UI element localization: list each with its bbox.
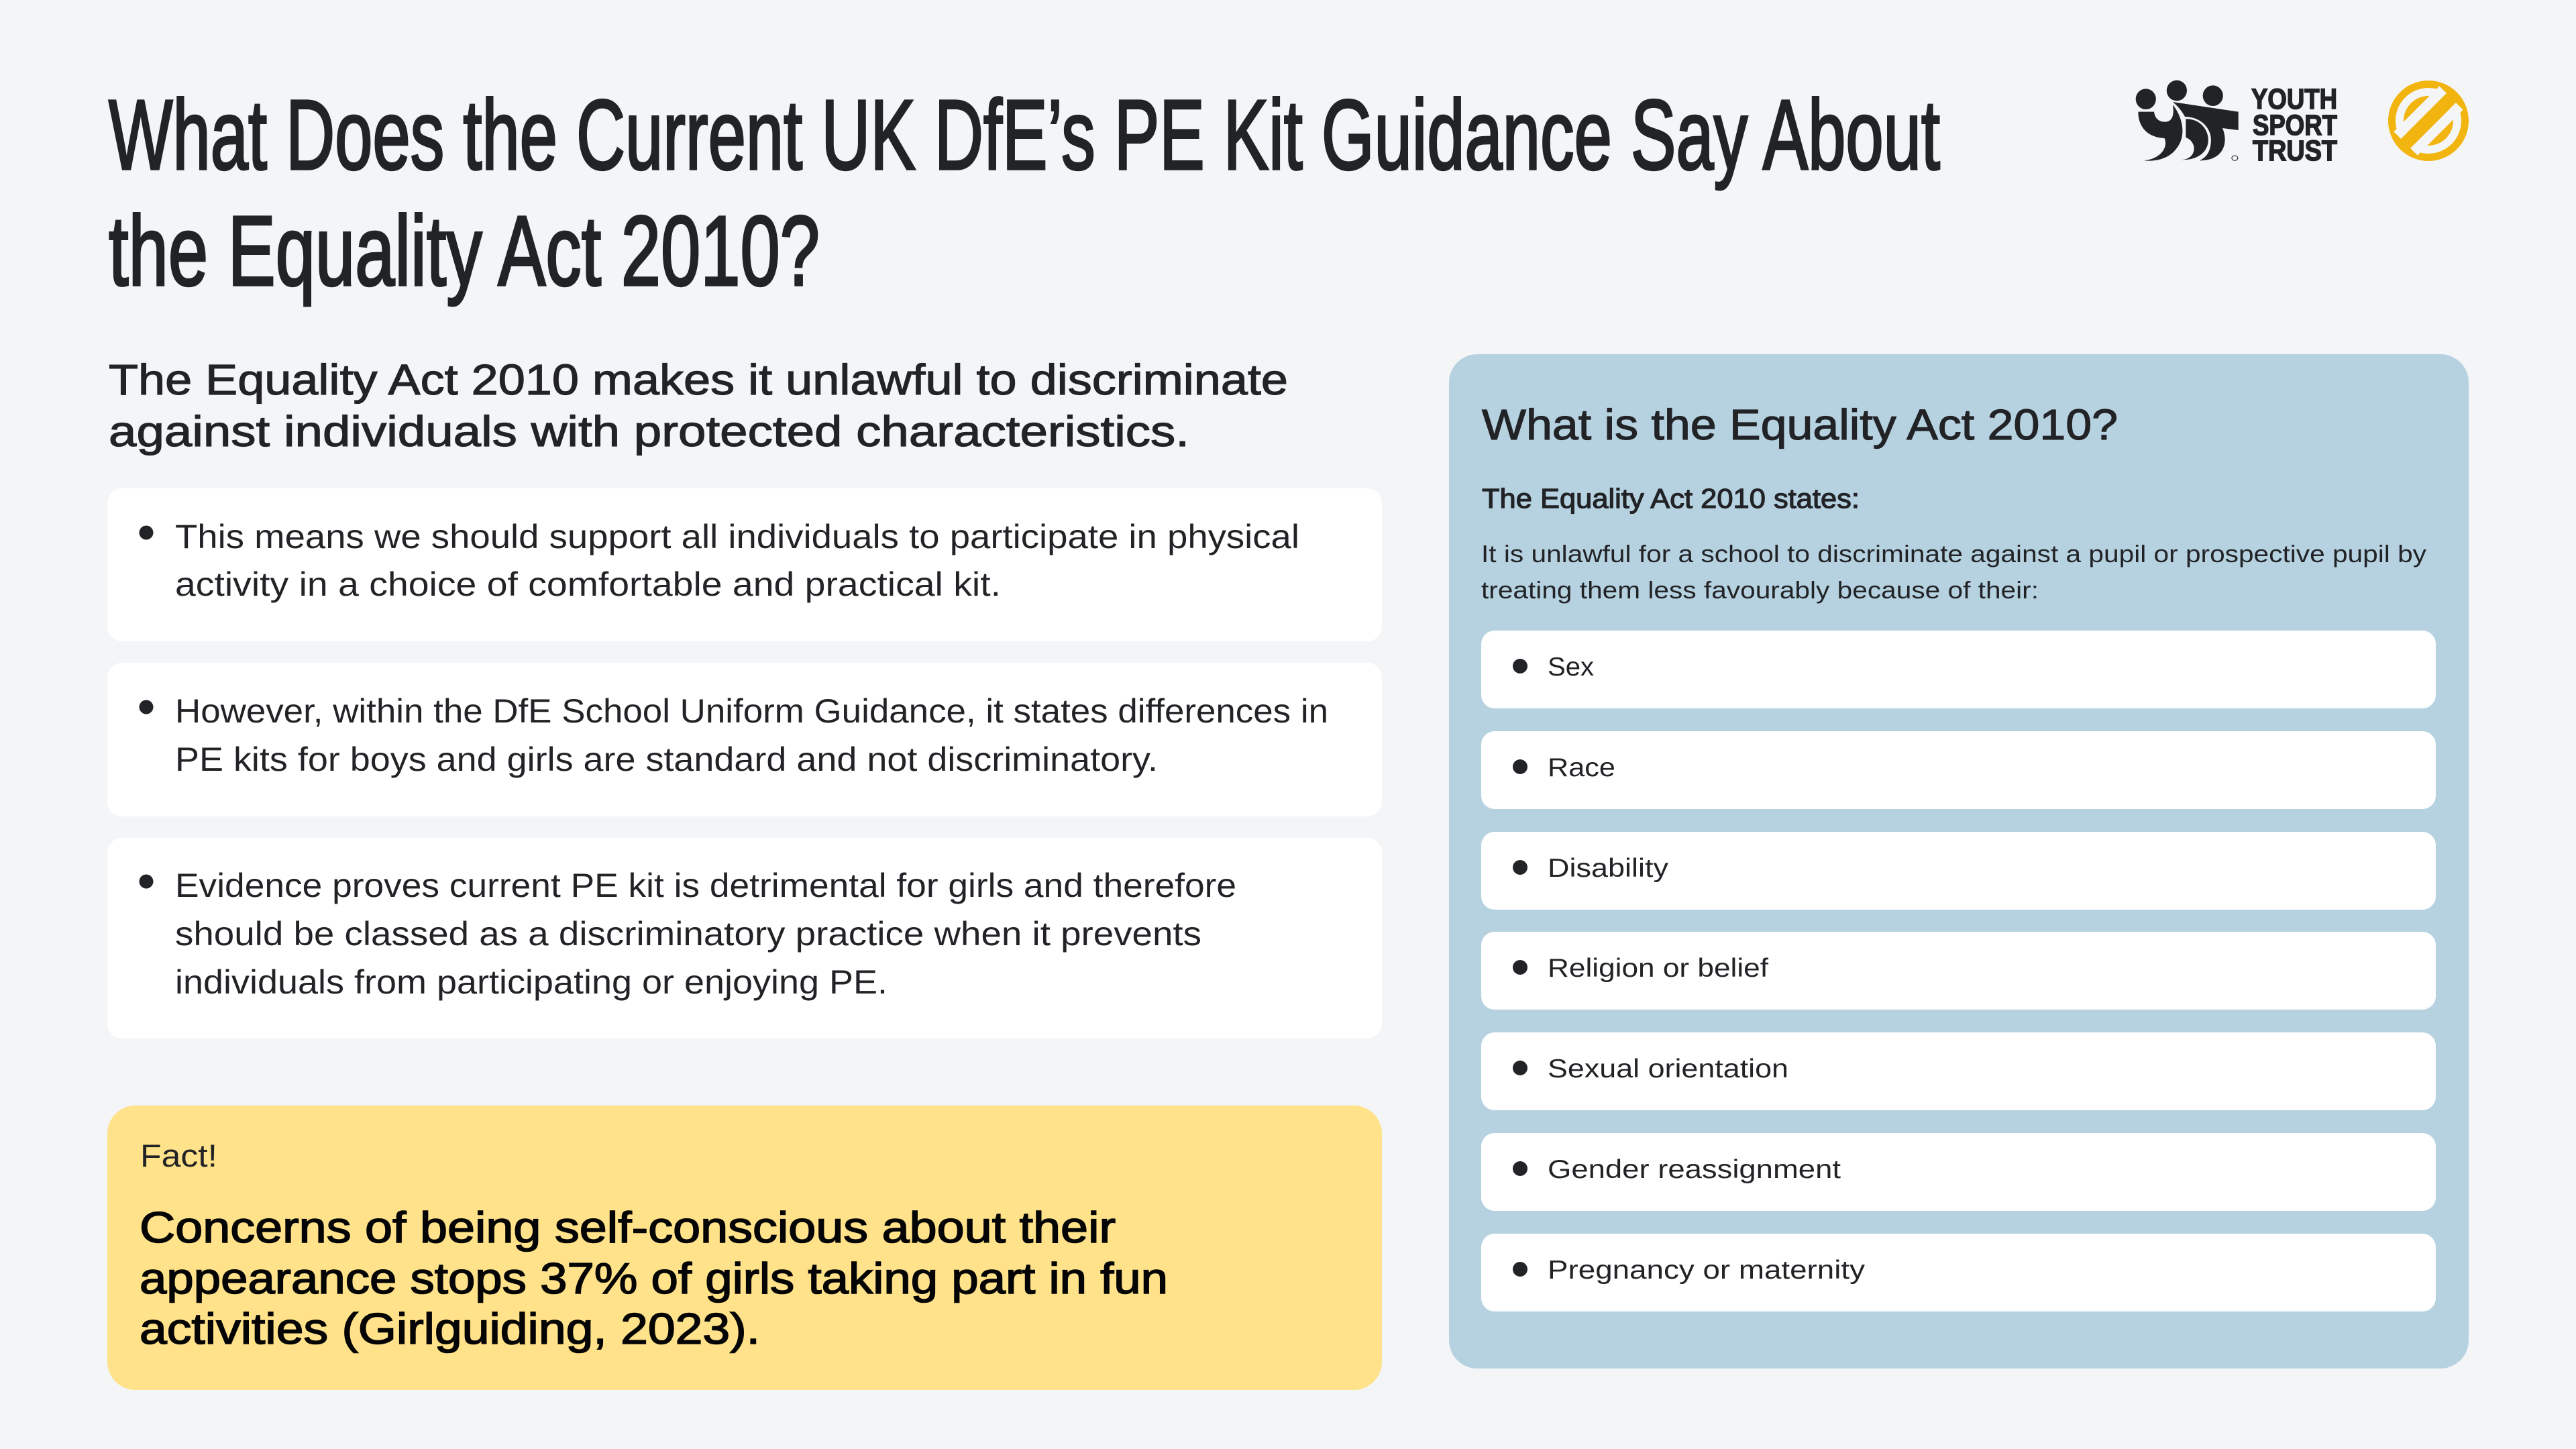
list item: disability bbox=[1481, 832, 2436, 910]
panel: fact callout: Concerns of being self-conscious about their bbox=[140, 1203, 1116, 1252]
panel: what is the Equality Act 2010 bbox=[1449, 354, 2469, 1368]
panel: bullet card 3: should be classed as a discriminatory practice when it prevents bbox=[175, 915, 1201, 953]
panel: fact callout: activities (Girlguiding, 2023). bbox=[140, 1304, 760, 1353]
panel: bullet card 1 bbox=[107, 488, 1382, 641]
panel heading: What is the Equality Act 2010? bbox=[1482, 400, 2118, 449]
list item: pregnancy or maternity: Pregnancy or maternity bbox=[1548, 1256, 1866, 1285]
title: the Equality Act 2010? bbox=[109, 196, 820, 307]
list item: sex: Sex bbox=[1548, 653, 1595, 682]
title bbox=[109, 80, 1940, 307]
panel: bullet card 3 bbox=[107, 838, 1382, 1038]
panel: bullet card 3: individuals from participating or enjoying PE. bbox=[175, 963, 888, 1001]
subheading: The Equality Act 2010 makes it unlawful to discriminate bbox=[109, 356, 1288, 404]
list item: gender reassignment bbox=[1481, 1133, 2436, 1211]
panel subheading: The Equality Act 2010 states: bbox=[1482, 483, 1860, 514]
panel: fact callout: Fact! bbox=[140, 1138, 217, 1173]
logo: Youth Sport Trust bbox=[2136, 80, 2337, 167]
subheading bbox=[109, 356, 1288, 455]
list item: race: Race bbox=[1548, 753, 1615, 782]
panel description: treating them less favourably because of their: bbox=[1481, 576, 2039, 604]
panel: bullet card 1: activity in a choice of comfortable and practical kit. bbox=[175, 566, 1001, 603]
panel: fact callout: appearance stops 37% of girls taking part in fun bbox=[140, 1254, 1168, 1303]
list item: pregnancy or maternity bbox=[1481, 1234, 2436, 1311]
logo: yellow circle mark bbox=[2388, 80, 2469, 161]
panel: bullet card 2: However, within the DfE School Uniform Guidance, it states differences in bbox=[175, 692, 1328, 730]
panel description bbox=[1481, 540, 2427, 604]
list item: sex bbox=[1481, 631, 2436, 708]
list item: race bbox=[1481, 731, 2436, 809]
list item: religion or belief bbox=[1481, 932, 2436, 1010]
logo: Youth Sport Trust: SPORT bbox=[2253, 109, 2337, 142]
logo: Youth Sport Trust: YOUTH bbox=[2251, 83, 2337, 115]
panel: bullet card 1: This means we should support all individuals to participate in physical bbox=[175, 518, 1299, 555]
panel: bullet card 3: Evidence proves current PE kit is detrimental for girls and therefore bbox=[175, 867, 1236, 904]
panel description: It is unlawful for a school to discriminate against a pupil or prospective pupil by bbox=[1481, 540, 2427, 568]
panel: bullet card 2: PE kits for boys and girls are standard and not discriminatory. bbox=[175, 741, 1158, 778]
list item: religion or belief: Religion or belief bbox=[1548, 954, 1768, 983]
logo: Youth Sport Trust: TRUST bbox=[2253, 135, 2337, 167]
list item: disability: Disability bbox=[1548, 854, 1669, 883]
list item: gender reassignment: Gender reassignment bbox=[1548, 1155, 1841, 1184]
panel: fact callout bbox=[107, 1106, 1382, 1390]
subheading: against individuals with protected characteristics. bbox=[109, 407, 1189, 455]
list item: sexual orientation: Sexual orientation bbox=[1548, 1055, 1788, 1083]
list item: sexual orientation bbox=[1481, 1032, 2436, 1110]
panel: bullet card 2 bbox=[107, 663, 1382, 816]
